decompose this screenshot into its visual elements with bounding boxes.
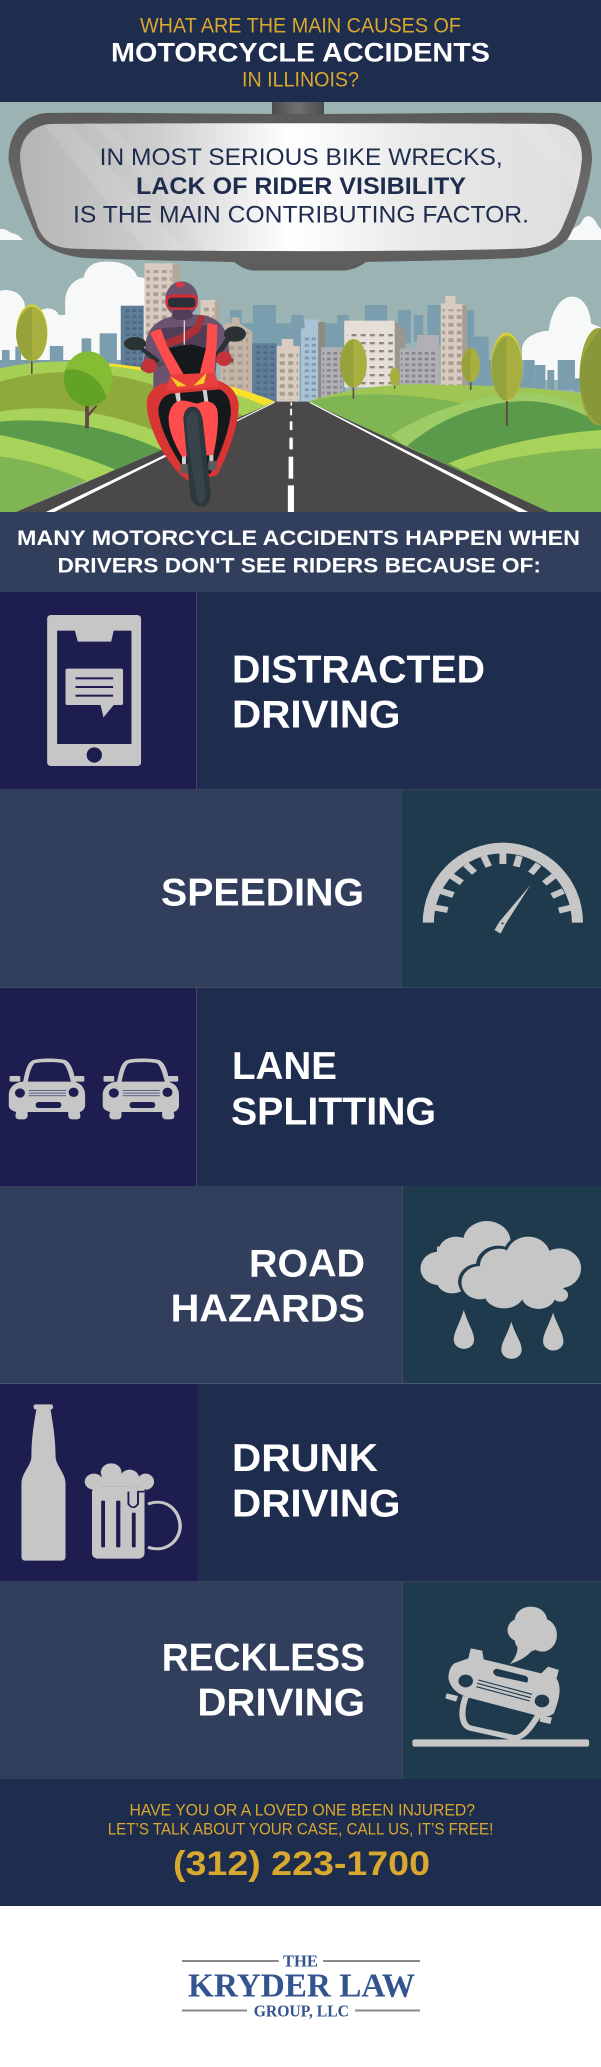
- road scene illustration: [0, 102, 601, 513]
- heading: reckless driving: RECKLESS: [162, 1637, 365, 1680]
- distant skyline: [0, 305, 601, 403]
- logo word: the: THE: [283, 1952, 318, 1971]
- row: drunk driving: [0, 1384, 601, 1582]
- handlebar and hands: [141, 362, 164, 370]
- title line 3: IN ILLINOIS?: [242, 68, 359, 91]
- banner line 2: DRIVERS DON'T SEE RIDERS BECAUSE OF:: [58, 553, 541, 577]
- fender: [169, 401, 218, 457]
- mirrors: [140, 347, 160, 364]
- row: lane splitting: [0, 988, 601, 1186]
- headlights: [171, 377, 187, 387]
- forks: [175, 393, 181, 404]
- road: [15, 402, 550, 512]
- heading: lane splitting: SPLITTING: [231, 1090, 436, 1133]
- small clouds behind mirror: [0, 216, 601, 240]
- cta line 1: HAVE YOU OR A LOVED ONE BEEN INJURED?: [130, 1801, 475, 1820]
- banner: [0, 512, 601, 592]
- footer call to action: [0, 1779, 601, 1906]
- cta line 2: LET’S TALK ABOUT YOUR CASE, CALL US, IT’S FREE!: [108, 1819, 493, 1838]
- icon: speedometer: [423, 843, 583, 934]
- trees: [16, 304, 601, 428]
- heading: lane splitting: LANE: [232, 1045, 337, 1088]
- mirror text line 1: IN MOST SERIOUS BIKE WRECKS,: [100, 144, 503, 171]
- icon: two cars: [9, 1059, 179, 1119]
- row: speeding: [0, 790, 601, 988]
- icon: smartphone: [47, 615, 141, 766]
- left hills: [0, 361, 276, 513]
- heading: speeding: SPEEDING: [161, 872, 364, 915]
- title line 2: MOTORCYCLE ACCIDENTS: [111, 37, 490, 67]
- header panel: [0, 0, 601, 102]
- windshield: [163, 344, 206, 375]
- heading: drunk driving: DRIVING: [232, 1483, 400, 1526]
- title line 1: WHAT ARE THE MAIN CAUSES OF: [140, 14, 461, 37]
- right hills: [309, 384, 601, 513]
- heading: road hazards: ROAD: [249, 1243, 365, 1286]
- clouds: [0, 262, 601, 380]
- mirror glass: [15, 120, 600, 255]
- bike fairing: [147, 380, 239, 480]
- scene artwork in zoom coordinates: [0, 262, 601, 513]
- row: reckless driving: [0, 1582, 601, 1779]
- mirror text line 2: LACK OF RIDER VISIBILITY: [136, 173, 466, 200]
- icon: overturned car with smoke: [412, 1607, 589, 1747]
- heading: drunk driving: DRUNK: [232, 1437, 378, 1480]
- helmet: [165, 281, 198, 317]
- rider torso: [143, 315, 230, 393]
- banner line 1: MANY MOTORCYCLE ACCIDENTS HAPPEN WHEN: [17, 526, 580, 550]
- buildings: [121, 263, 467, 403]
- heading: reckless driving: DRIVING: [197, 1682, 365, 1725]
- row: distracted driving: [0, 592, 601, 790]
- logo: the kryder law group: [182, 1952, 420, 2021]
- heading: road hazards: HAZARDS: [171, 1288, 365, 1331]
- heading: distracted driving: DRIVING: [232, 693, 400, 736]
- rearview mirror: [8, 102, 600, 270]
- front wheel: [183, 407, 211, 507]
- phone number: (312) 223-1700: [173, 1845, 430, 1883]
- motorcycle and rider: [124, 281, 246, 507]
- heading: distracted driving: DISTRACTED: [232, 649, 485, 692]
- icon: beer bottle and mug: [21, 1404, 180, 1561]
- mirror text line 3: IS THE MAIN CONTRIBUTING FACTOR.: [73, 202, 529, 229]
- logo word: group llc: GROUP, LLC: [254, 2002, 349, 2021]
- mirror frame: [8, 113, 592, 270]
- mirror stalk: [272, 102, 324, 116]
- logo word: kryder law: KRYDER LAW: [188, 1968, 415, 2005]
- row: road hazards: [0, 1186, 601, 1384]
- icon: rain clouds: [420, 1221, 581, 1359]
